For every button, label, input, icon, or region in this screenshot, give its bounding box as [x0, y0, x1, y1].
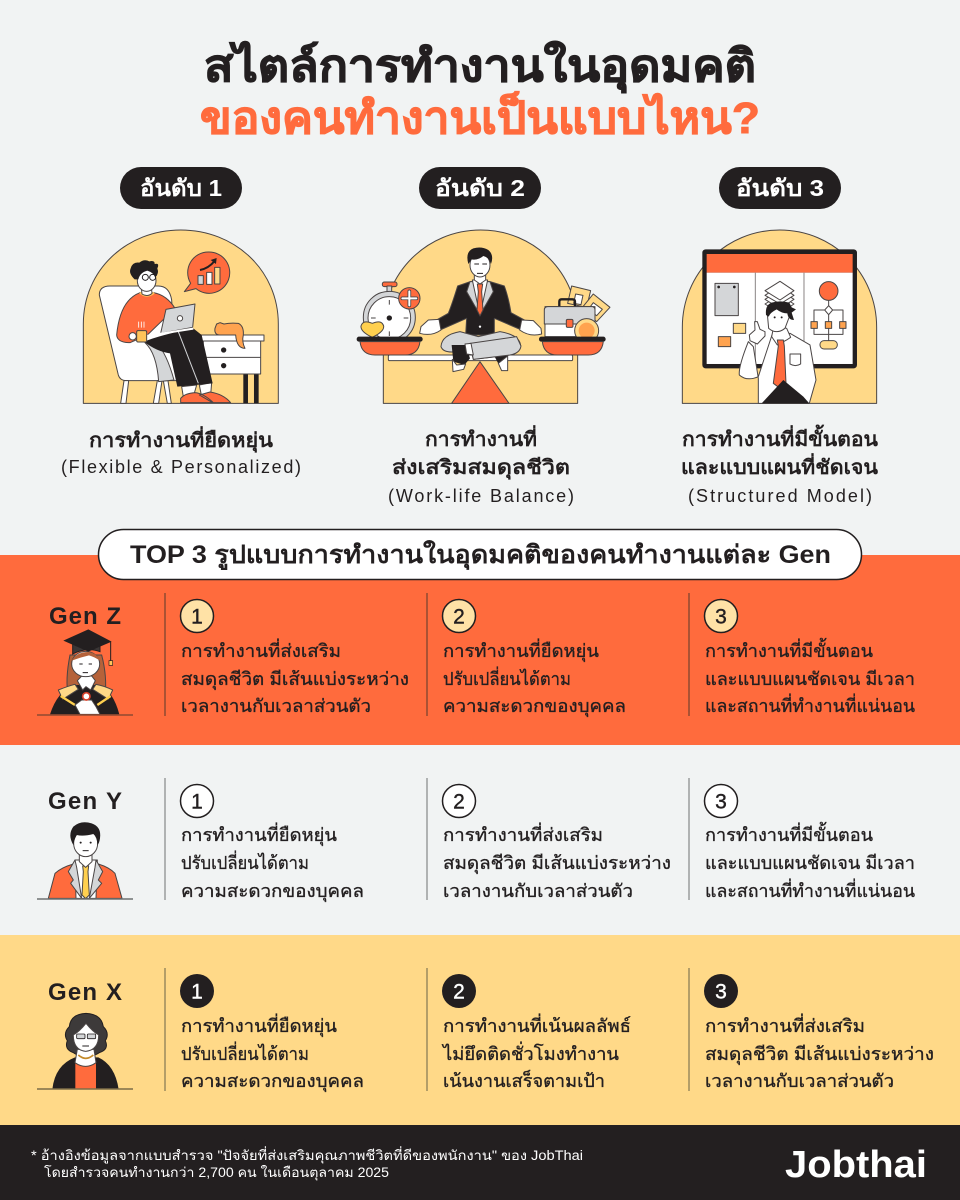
rank item: Gen X 3: เวลางานกับเวลาส่วนตัว	[705, 1071, 894, 1091]
rank item: Gen X 3: สมดุลชีวิต มีเส้นแบ่งระหว่าง	[705, 1044, 934, 1065]
rank item: Gen X 2: เน้นงานเสร็จตามเป้า	[443, 1069, 605, 1091]
rank item: Gen Z 1: การทำงานที่ส่งเสริม	[181, 638, 341, 661]
rank item: Gen Z 1: เวลางานกับเวลาส่วนตัว	[181, 696, 371, 716]
rank item: Gen Z 1: 1	[191, 606, 203, 628]
rank badge 2	[419, 167, 541, 209]
rank item: Gen Z 3: การทำงานที่มีขั้นตอน	[705, 638, 873, 661]
rank item: Gen Y 1: 1	[191, 790, 203, 814]
rank item: Gen Y 2: 2	[453, 790, 465, 814]
rank item: Gen X 1	[180, 974, 364, 1092]
title	[200, 40, 760, 143]
rank item: Gen X 1: 1	[191, 980, 203, 1004]
banner heading	[98, 530, 862, 580]
label: work-life balance: การทำงานที่	[425, 424, 537, 451]
rank item: Gen Y 2: สมดุลชีวิต มีเส้นแบ่งระหว่าง	[443, 853, 671, 874]
rank item: Gen X 3: 3	[715, 980, 727, 1004]
label: structured model	[681, 424, 878, 506]
label: flexible work: (Flexible & Personalized)	[61, 457, 301, 477]
label: structured model: และแบบแผนที่ชัดเจน	[681, 452, 878, 479]
rank item: Gen X 2	[441, 974, 631, 1091]
icon: Gen Y man in orange suit	[48, 822, 122, 899]
rank item: Gen X 2: การทำงานที่เน้นผลลัพธ์	[443, 1013, 631, 1036]
rank badge 1	[120, 167, 242, 209]
rank item: Gen Y 3	[704, 784, 915, 901]
rank item: Gen Z 3: 3	[715, 606, 727, 628]
panel: Gen Z: Gen Z	[49, 603, 121, 630]
rank item: Gen Y 1: ปรับเปลี่ยนได้ตาม	[181, 850, 309, 873]
label: flexible work: การทำงานที่ยืดหยุ่น	[89, 425, 273, 453]
footer: * อ้างอิงข้อมูลจากแบบสำรวจ "ปัจจัยที่ส่งเสริมคุณภาพชีวิตที่ดีของพนักงาน" ของ JobThai	[31, 1146, 583, 1164]
rank item: Gen Z 3: และแบบแผนชัดเจน มีเวลา	[705, 669, 915, 689]
rank item: Gen Z 2: การทำงานที่ยืดหยุ่น	[443, 638, 599, 662]
panel: Gen X	[0, 935, 960, 1125]
rank item: Gen X 1: ความสะดวกของบุคคล	[181, 1071, 364, 1092]
rank item: Gen Z 1: สมดุลชีวิต มีเส้นแบ่งระหว่าง	[181, 669, 409, 690]
rank item: Gen Y 2	[442, 784, 671, 901]
illustration: work-life balance, man meditating on scale	[357, 230, 610, 403]
rank item: Gen Y 3: และแบบแผนชัดเจน มีเวลา	[705, 853, 915, 873]
footer	[0, 1125, 960, 1200]
rank item: Gen Y 3: และสถานที่ทำงานที่แน่นอน	[705, 878, 915, 901]
label: work-life balance	[388, 424, 574, 506]
rank badge 2: อันดับ 2	[435, 175, 525, 201]
panel: Gen Z	[0, 555, 960, 745]
footer: โดยสำรวจคนทำงานกว่า 2,700 คน ในเดือนตุลาคม 2025	[44, 1164, 389, 1181]
rank item: Gen Z 2: 2	[453, 606, 465, 628]
rank item: Gen X 2: 2	[453, 980, 465, 1004]
panel: Gen Y: Gen Y	[48, 788, 122, 815]
illustration: flexible work, man with laptop in armchair	[83, 230, 278, 403]
rank item: Gen Y 2: การทำงานที่ส่งเสริม	[443, 822, 603, 845]
label: work-life balance: (Work-life Balance)	[388, 486, 574, 506]
label: flexible work	[61, 425, 301, 477]
rank item: Gen Z 2: ความสะดวกของบุคคล	[443, 696, 626, 717]
rank badge 1: อันดับ 1	[140, 175, 222, 201]
panel: Gen X: Gen X	[48, 979, 122, 1006]
illustration: structured work, man in front of planning board	[682, 230, 877, 403]
logo: Jobthai: Jobthai	[785, 1144, 927, 1186]
rank item: Gen Z 1	[180, 600, 409, 716]
rank item: Gen X 1: ปรับเปลี่ยนได้ตาม	[181, 1041, 309, 1064]
rank item: Gen Z 3: และสถานที่ทำงานที่แน่นอน	[705, 693, 915, 716]
icon: Gen X woman with glasses	[52, 1013, 119, 1089]
rank item: Gen Y 1: การทำงานที่ยืดหยุ่น	[181, 822, 337, 846]
rank badge 3: อันดับ 3	[736, 175, 824, 201]
rank item: Gen Z 2	[442, 600, 626, 717]
rank badge 3	[719, 167, 841, 209]
rank item: Gen X 1: การทำงานที่ยืดหยุ่น	[181, 1013, 337, 1037]
icon: Gen Z graduate	[50, 629, 119, 714]
rank item: Gen Y 2: เวลางานกับเวลาส่วนตัว	[443, 881, 633, 901]
rank item: Gen Z 2: ปรับเปลี่ยนได้ตาม	[443, 666, 571, 689]
rank item: Gen Y 3: การทำงานที่มีขั้นตอน	[705, 822, 873, 845]
rank item: Gen Y 1	[180, 784, 364, 902]
rank item: Gen X 3	[704, 974, 934, 1091]
panel: Gen Y	[37, 778, 915, 902]
label: work-life balance: ส่งเสริมสมดุลชีวิต	[392, 456, 570, 480]
title: ของคนทำงานเป็นแบบไหน?	[200, 91, 760, 143]
rank item: Gen Y 1: ความสะดวกของบุคคล	[181, 881, 364, 902]
rank item: Gen Z 3	[704, 600, 915, 716]
label: structured model: การทำงานที่มีขั้นตอน	[682, 424, 878, 451]
rank item: Gen X 3: การทำงานที่ส่งเสริม	[705, 1013, 865, 1036]
label: structured model: (Structured Model)	[688, 486, 872, 506]
rank item: Gen Y 3: 3	[715, 790, 727, 814]
title: สไตล์การทำงานในอุดมคติ	[204, 40, 756, 94]
banner heading: TOP 3 รูปแบบการทำงานในอุดมคติของคนทำงานแต่ละ Gen	[130, 539, 831, 571]
rank item: Gen X 2: ไม่ยึดติดชั่วโมงทำงาน	[441, 1041, 619, 1064]
